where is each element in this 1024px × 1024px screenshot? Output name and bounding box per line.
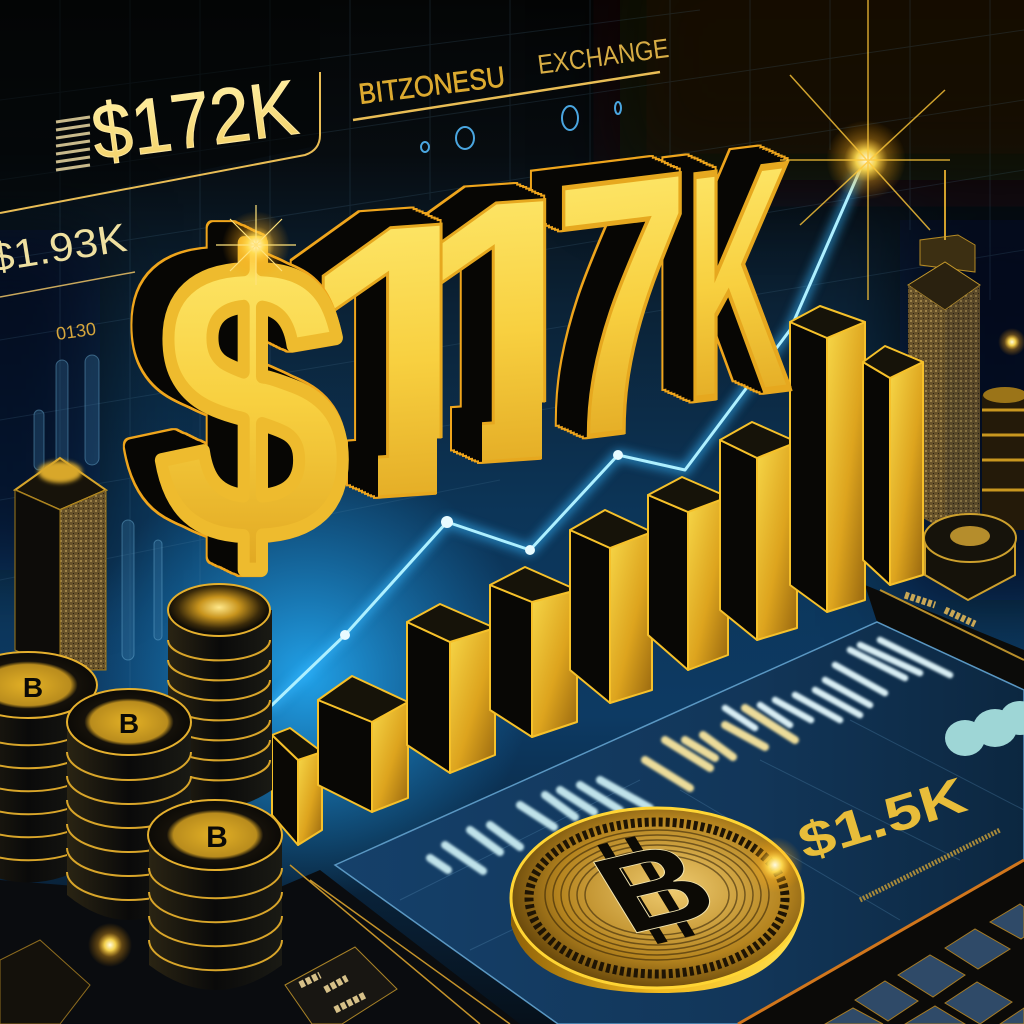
glyph: first 1: 1 <box>297 135 513 585</box>
coin stack: left: B <box>23 672 43 703</box>
coin stack: front: B <box>206 821 228 854</box>
panel: exchange header <box>353 33 671 120</box>
bar 8 <box>790 306 865 612</box>
glyph: 7: 7 <box>553 95 691 519</box>
bitcoin symbol: B <box>571 818 739 957</box>
icon: bitcoin coin <box>511 808 803 993</box>
panel: bottom-right table <box>738 860 1024 1024</box>
coin stack: middle: B <box>119 708 139 739</box>
bar 6 <box>648 477 728 670</box>
exchange label: EXCHANGE <box>536 33 671 80</box>
glyph: dollar sign: $ <box>156 179 348 626</box>
panel: top price ticker <box>0 0 320 213</box>
secondary price <box>0 216 135 344</box>
glyph: second 1: 1 <box>406 113 614 547</box>
panel: bottom-left table <box>0 865 520 1024</box>
secondary price: 0130 <box>55 319 97 344</box>
coin stack: front <box>148 800 282 990</box>
exchange name: BITZONESU <box>357 61 507 111</box>
chart: blurred sparkline strip, blue <box>430 780 650 871</box>
bar 5 <box>570 510 652 703</box>
small caption strip <box>860 830 1000 900</box>
icons: small blue indicators <box>421 102 621 152</box>
icon: light blue pills <box>945 701 1024 756</box>
chart points <box>340 450 623 640</box>
glyph: K: K <box>685 95 791 470</box>
panel: top-right table <box>865 585 1024 700</box>
building: right coin tower <box>982 387 1024 530</box>
bar 2 <box>318 676 408 812</box>
bar 1 <box>272 728 322 845</box>
chart: blurred sparkline strip, white <box>725 640 950 728</box>
icon: ticker lines <box>56 117 90 170</box>
headline: $117K 3D lettering <box>122 144 793 578</box>
bar 9 <box>863 346 923 585</box>
coin glint <box>747 837 803 893</box>
coin stack: left <box>0 652 97 882</box>
chart: rising glowing line <box>272 170 860 705</box>
icon: small sparkles <box>88 328 1024 967</box>
bar 7 <box>720 422 797 640</box>
building: left tower <box>15 458 106 670</box>
icon: sparkle on dollar <box>216 205 296 285</box>
ticker value: $172K <box>87 63 302 177</box>
bar 3 <box>407 604 495 773</box>
chart: blurred sparkline strip, gold <box>645 708 795 788</box>
decorative left skyline glow <box>34 355 162 660</box>
value: $1.5K <box>792 767 1000 900</box>
panel: glass data panel <box>335 622 1024 1024</box>
building: right tower <box>908 170 980 530</box>
value: $1.5K: $1.5K <box>792 767 973 871</box>
icon: small coin on right <box>924 514 1016 600</box>
chart: gold 3D bars <box>272 306 923 845</box>
bar 4 <box>490 567 577 737</box>
coin stack: back centre <box>168 584 272 808</box>
icon: sparkle at line peak <box>780 0 950 300</box>
coin stack: middle <box>67 689 191 920</box>
